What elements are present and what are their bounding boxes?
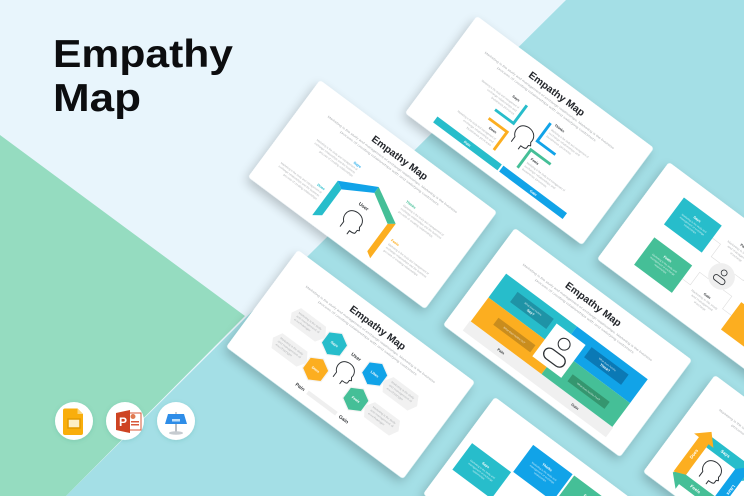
Feels box: management of exchange	[649, 255, 676, 277]
Feels box: Feels	[663, 255, 672, 264]
Thinks text: exchange relationships and	[548, 131, 581, 157]
Does panel: and management of	[277, 339, 302, 359]
Says text: exchange relationships and	[486, 88, 518, 113]
icon: Google Slides	[55, 402, 93, 440]
Says arrow	[701, 432, 744, 488]
Says box: Says	[693, 215, 702, 223]
Says text: business process	[490, 96, 516, 116]
Says box	[664, 197, 722, 253]
Says bracket	[495, 92, 527, 123]
title	[53, 33, 233, 120]
card heading: Empathy Map	[347, 304, 407, 353]
Feels box: Marketing is the study and	[651, 252, 678, 274]
card intro text: Marketing is the study and management of exchange relationships. Marketing is the business	[305, 285, 436, 384]
Likes hexagon	[358, 357, 392, 391]
Says box: relationships	[683, 223, 698, 235]
title: Empathy	[53, 33, 233, 76]
Gain text: of exchange	[693, 300, 707, 312]
Says panel: and management of	[296, 314, 321, 334]
Thinks text: exchange relationships and the business	[400, 207, 443, 240]
Says box	[452, 443, 511, 496]
Thinks box: Thinks	[541, 462, 553, 472]
Does box	[721, 302, 744, 358]
Feels text: Marketing is the study and management of	[387, 242, 430, 276]
Says box: Marketing is the study and	[681, 213, 708, 234]
Says hexagon: Says	[330, 340, 339, 348]
Says text: Says	[511, 94, 521, 103]
Does panel	[267, 330, 312, 370]
Says box: management of exchange	[679, 215, 706, 237]
Does text: Marketing is the study and management of	[457, 109, 497, 141]
icon: Keynote	[157, 402, 195, 440]
Says box: management of exchange	[467, 461, 494, 483]
Does quadrant: What does he/she Do?	[503, 326, 527, 345]
Does text: Marketing is the study and management of	[280, 161, 323, 194]
card heading: Empathy Map	[526, 70, 586, 119]
Says text: exchange relationships and the business	[313, 141, 356, 175]
Feels text: exchange relationships and	[523, 164, 557, 190]
Feels panel	[359, 399, 404, 439]
card: house-shaped slide	[248, 80, 497, 309]
pain gain strip: Gain	[570, 403, 580, 411]
card intro text: process of creating relationships with and satisfying customers	[317, 300, 418, 377]
card intro text: Marketing is the study and management of exchange relationships. Marketing is the business	[522, 263, 653, 362]
user head icon	[696, 457, 727, 489]
Says panel: Marketing is the study	[298, 311, 323, 331]
Feels bracket	[518, 150, 551, 182]
Feels text: exchange relationships and the business	[385, 245, 428, 279]
Does text: exchange relationships and	[462, 119, 495, 144]
Says quadrant: What does he/she	[524, 301, 543, 317]
user circle	[703, 258, 740, 295]
card intro text	[481, 51, 615, 154]
Feels box: relationships	[653, 263, 668, 275]
card intro text	[324, 115, 458, 218]
Does arrow: Does	[689, 448, 699, 460]
Does text: business process	[466, 126, 493, 147]
user head icon	[508, 122, 539, 154]
pain gain strip	[463, 321, 613, 437]
user tile	[532, 323, 586, 378]
Says arrow: Says	[720, 449, 731, 459]
Does panel: Marketing is the study	[279, 336, 305, 356]
card intro text	[519, 263, 653, 366]
Feels quadrant	[542, 350, 630, 427]
user head icon	[336, 207, 367, 239]
Says text: Marketing is the study and management of	[316, 138, 358, 171]
pain to gain scale: Pain	[294, 382, 306, 393]
Feels box	[554, 476, 613, 496]
Feels arrow: Feels	[689, 484, 702, 495]
Says text: Marketing is the study and management of	[481, 79, 520, 110]
Feels hexagon	[339, 382, 373, 417]
Likes panel	[378, 374, 423, 414]
Gain text: and management	[690, 293, 714, 312]
Pain text	[722, 236, 744, 268]
Does bracket	[475, 118, 507, 150]
Thinks quadrant	[559, 326, 648, 403]
Thinks box: Marketing is the study and	[531, 461, 558, 482]
Feels text: Feels	[390, 238, 400, 247]
card intro text	[302, 285, 436, 388]
Thinks quadrant: What does he/she	[598, 357, 618, 373]
Gain bar	[499, 166, 567, 219]
card intro text: Marketing is the study and management of exchange relationships. Marketing is the business	[484, 51, 615, 150]
user label: User	[357, 201, 370, 213]
Does text: Does	[488, 126, 497, 135]
Says panel: exchange	[293, 317, 312, 333]
Says box: Marketing is the study and	[469, 459, 497, 480]
Says quadrant	[488, 274, 577, 350]
Gain bar: Gain	[529, 189, 538, 197]
card heading: Empathy Map	[369, 134, 429, 183]
Does text: Does	[316, 183, 326, 191]
card: top slide with corner brackets	[405, 16, 654, 245]
background: green corner panel	[0, 135, 245, 496]
card: hexagon slide	[226, 250, 475, 479]
Feels box	[634, 237, 692, 293]
Thinks text: Thinks	[405, 200, 417, 210]
Pain bar	[433, 116, 502, 170]
Feels quadrant: What does he/she Feel?	[576, 382, 602, 402]
Does text: process of creating relationships	[283, 173, 318, 201]
connector lines	[682, 238, 744, 315]
user label: User	[350, 352, 362, 363]
card: colour grid slide	[443, 228, 692, 457]
Does hexagon	[299, 352, 333, 387]
user head icon	[330, 358, 359, 388]
Likes panel: Marketing is the study	[390, 380, 416, 400]
Does quadrant	[471, 297, 559, 374]
pain gain strip: Pain	[496, 348, 506, 356]
Says box: Says	[481, 461, 490, 469]
Does hexagon: Does	[311, 365, 320, 374]
Feels panel: Marketing is the study	[372, 405, 397, 425]
card intro text: process of creating relationships with and satisfying customers	[339, 130, 440, 207]
Thinks box: relationships	[533, 471, 548, 483]
Says box: relationships	[472, 469, 486, 481]
Thinks text: process of creating relationships	[397, 210, 434, 239]
Feels hexagon: Feels	[351, 395, 361, 404]
Says panel	[286, 305, 331, 345]
card: small boxes slide, right edge	[597, 162, 744, 391]
Thinks box: management of exchange	[529, 463, 556, 485]
Does panel: exchange	[275, 342, 294, 358]
Feels text: Feels	[530, 157, 540, 166]
Likes hexagon: Likes	[370, 370, 379, 379]
Says quadrant: Say?	[526, 308, 535, 317]
Says text: process of creating relationships	[318, 150, 354, 178]
Thinks text: Marketing is the study and management of	[402, 204, 445, 237]
Thinks text: Marketing is the study and management of	[550, 128, 590, 159]
Says text: Says	[353, 161, 362, 169]
icon: PowerPoint: P	[119, 415, 127, 429]
Thinks box	[513, 445, 573, 496]
Gain text	[686, 285, 722, 317]
Likes panel: and management of	[388, 383, 413, 403]
Thinks text: Thinks	[554, 123, 565, 134]
Thinks bracket	[537, 123, 569, 155]
Likes arrow	[703, 456, 744, 496]
title: Map	[53, 77, 141, 120]
Does arrow	[669, 424, 720, 482]
card: arrow cycle slide	[643, 375, 744, 496]
Does text: exchange relationships and the business	[278, 164, 321, 198]
Feels panel: and management of	[369, 408, 394, 428]
Pain bar: Pain	[463, 140, 471, 148]
card intro text: Marketing is the study and management of exchange relationships. Marketing is the business	[327, 115, 458, 214]
Gain text: Marketing is the study	[690, 288, 719, 311]
card intro text: process of creating relationships with and satisfying customers	[496, 66, 597, 143]
app icons row	[55, 402, 195, 440]
card: boxes slide, bottom	[423, 397, 672, 496]
card heading: Empathy Map	[563, 280, 623, 329]
Likes panel: exchange	[386, 386, 405, 402]
Thinks text: business process	[546, 134, 573, 156]
Feels panel: exchange	[367, 411, 386, 427]
Thinks quadrant: Think?	[599, 363, 611, 373]
pain to gain scale: Gain	[337, 414, 349, 425]
card intro text: process of creating relationships with and satisfying customers	[534, 278, 635, 355]
Feels text: business process	[521, 167, 548, 189]
Gain text: Gain	[703, 292, 711, 300]
pain to gain scale	[294, 382, 349, 425]
Likes arrow: Likes	[725, 484, 736, 496]
Feels arrow	[666, 463, 723, 496]
Feels text: Marketing is the study and management of	[526, 161, 566, 192]
house frame	[312, 165, 407, 258]
Says hexagon	[317, 327, 352, 361]
Feels text: process of creating relationships	[383, 249, 419, 277]
